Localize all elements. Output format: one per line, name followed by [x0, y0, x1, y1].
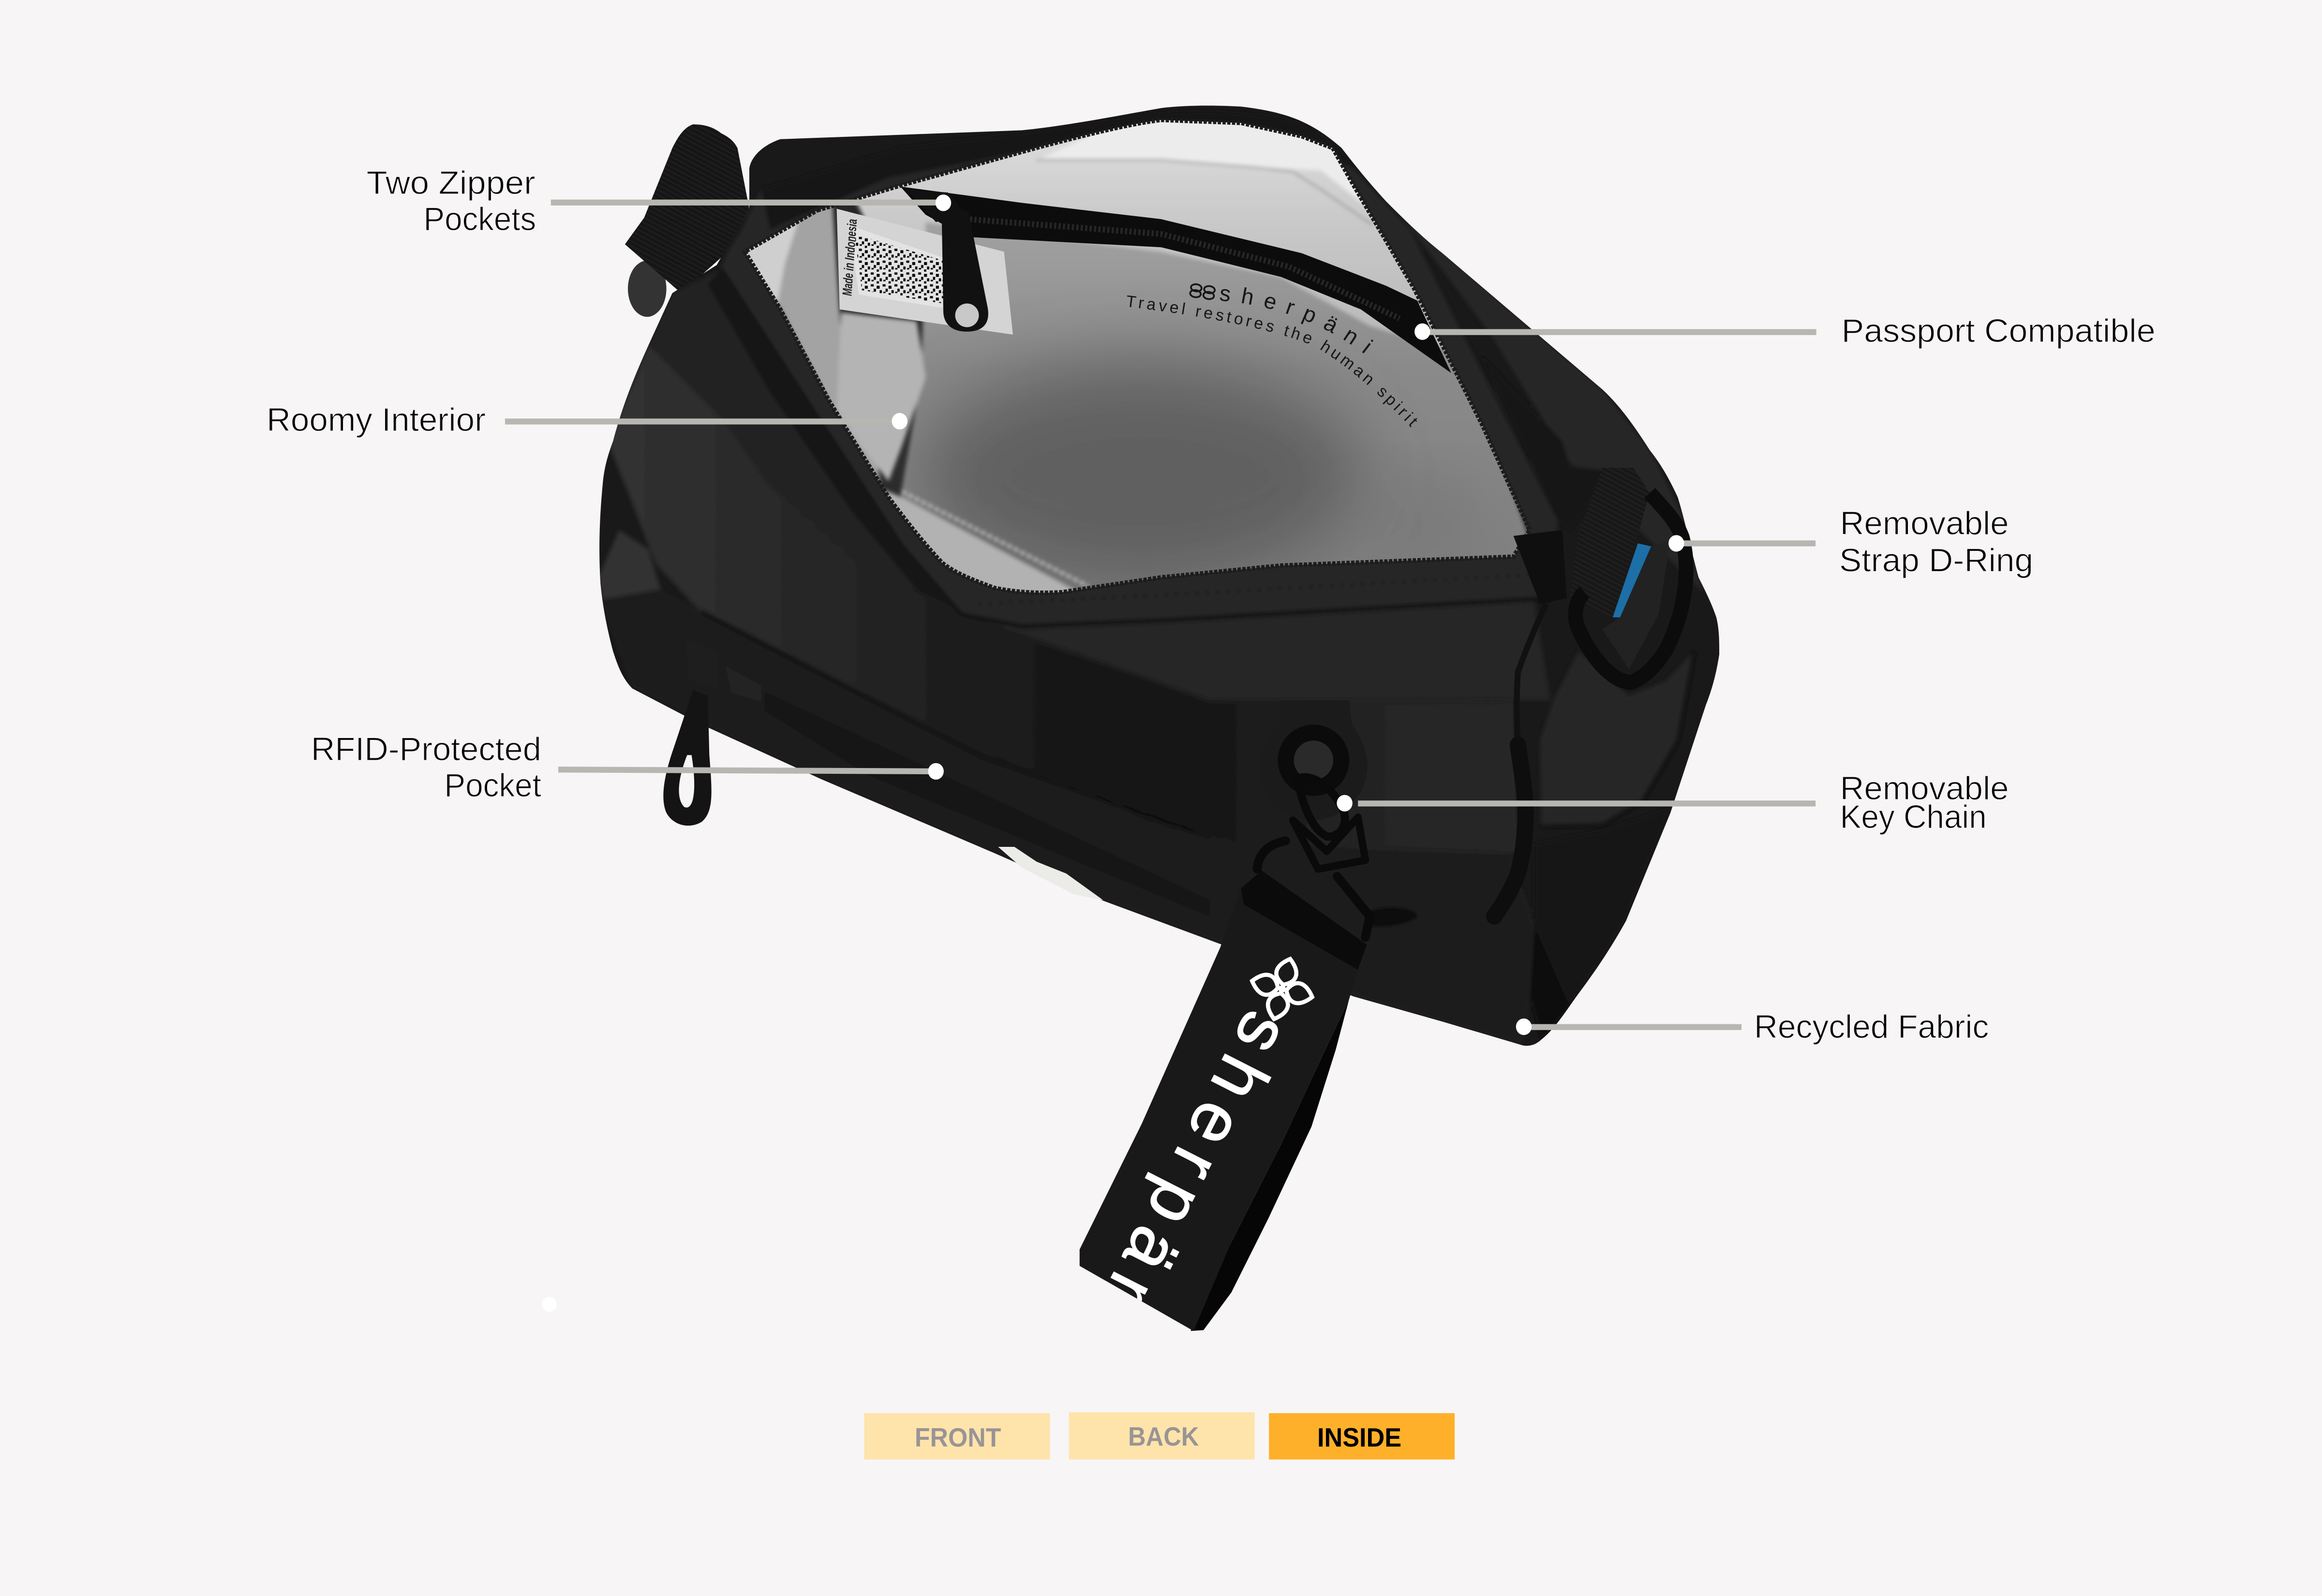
- callout: RFID-protected pocket: RFID-Protected: [311, 731, 541, 768]
- callout: RFID-protected pocket: Pocket: [444, 768, 541, 804]
- callout: removable strap D-ring: Removable: [1840, 505, 2009, 542]
- callout: recycled fabric: [1516, 1009, 1989, 1045]
- bag body: [563, 89, 1747, 1066]
- callout: passport compatible: [1414, 313, 2156, 349]
- white fragment behind bag: [998, 847, 1103, 900]
- lower zip panel: [703, 616, 1238, 944]
- callout: two zipper pockets: Two Zipper: [367, 165, 536, 201]
- light side pocket: [837, 312, 925, 481]
- callout: passport compatible: Passport Compatible: [1842, 313, 2156, 349]
- opening rim: [721, 112, 1558, 626]
- tab: back: [1069, 1412, 1255, 1460]
- main gray panel: [889, 222, 1548, 592]
- front fabric panel: [982, 600, 1550, 700]
- callout: removable key chain: [1337, 770, 2009, 835]
- left fabric strip: [648, 271, 915, 588]
- care label with QR code: [837, 209, 1013, 335]
- bottom light strip: [881, 488, 1081, 600]
- printed brand on lining: Travel restores the human spirit: [1127, 295, 1417, 428]
- tab: back: BACK: [1128, 1421, 1199, 1451]
- tab: front: FRONT: [915, 1422, 1001, 1452]
- strap wordmark: sherpäni: [1066, 1000, 1306, 1368]
- callout: roomy interior: Roomy Interior: [267, 402, 486, 438]
- callout: removable key chain: Key Chain: [1840, 799, 1987, 835]
- callout: recycled fabric: Recycled Fabric: [1754, 1009, 1989, 1045]
- lower front panel: [1222, 844, 1534, 1045]
- mesh side pocket: [736, 201, 881, 488]
- D-ring: [1576, 493, 1686, 682]
- tab: inside (active): [1269, 1413, 1455, 1460]
- right zipper pull cord: [1494, 530, 1567, 916]
- back pocket upper lining: [800, 89, 1481, 429]
- key chain clasp: [1257, 777, 1370, 937]
- stray white dot: [542, 1297, 557, 1312]
- callout: removable strap D-ring: Strap D-Ring: [1839, 543, 2033, 579]
- callout: removable strap D-ring: [1668, 505, 2033, 579]
- callout: two zipper pockets: [367, 165, 951, 237]
- tab: front: [864, 1413, 1050, 1460]
- strap loop top left: [625, 124, 749, 317]
- left end patch: [600, 531, 662, 601]
- zipper teeth edge: [745, 120, 1530, 593]
- flap band wrapping the front: [607, 345, 1518, 853]
- callout: roomy interior: [267, 402, 908, 438]
- printed brand on lining: sherpäni: [1220, 287, 1373, 354]
- care label with QR code: Made in Indonesia: [839, 219, 860, 296]
- zipper pull inside: [906, 190, 988, 332]
- wrist strap front: [1037, 859, 1392, 1368]
- key ring tab: [1259, 700, 1368, 820]
- product photo: open black crossbody bag: [599, 105, 1719, 1331]
- callout: RFID-protected pocket: [311, 731, 944, 804]
- tab: inside (active): INSIDE: [1317, 1422, 1401, 1452]
- interior lining: [745, 120, 1529, 593]
- callout: removable key chain: Removable: [1840, 770, 2009, 807]
- upper right fabric: [1401, 215, 1703, 592]
- left exterior zipper pull: [663, 638, 761, 826]
- right strap webbing: [1570, 468, 1670, 669]
- callout: two zipper pockets: Pockets: [424, 201, 536, 237]
- strap flower logo: [1244, 951, 1320, 1027]
- right side panels: [1540, 651, 1694, 826]
- interior zipper: [900, 187, 1451, 373]
- back of wrist strap: [1191, 999, 1349, 1331]
